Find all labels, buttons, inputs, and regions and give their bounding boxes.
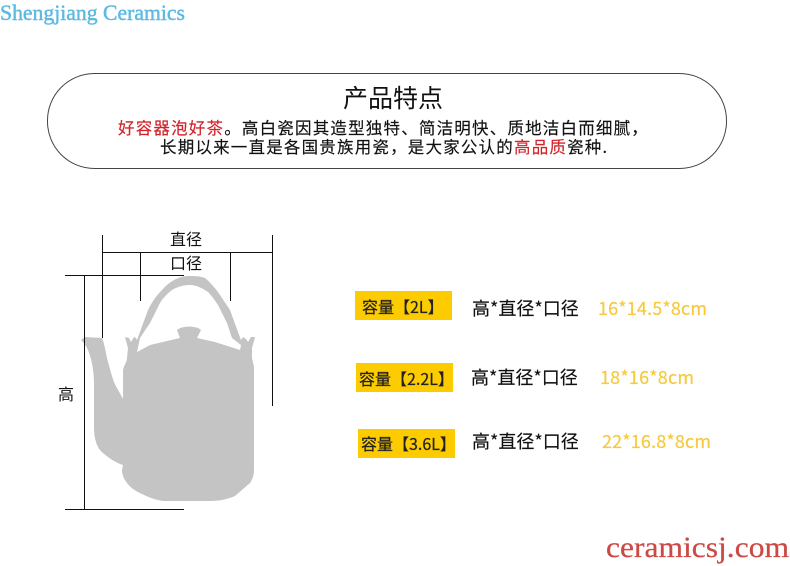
- label: diameter: 直径: [170, 226, 202, 250]
- dimension label: 高*直径*口径: [472, 295, 579, 321]
- dimension label: 高*直径*口径: [471, 364, 578, 390]
- watermark: ceramicsj.com: ceramicsj.com: [606, 531, 789, 564]
- capacity badge: 2.2L: 容量【2.2L】: [359, 366, 454, 390]
- text block: line two: 长期以来一直是各国贵族用瓷，是大家公认的高品质瓷种.: [160, 134, 608, 158]
- icon: teapot silhouette: [81, 276, 255, 501]
- text block: line one: 好容器泡好茶。高白瓷因其造型独特、简洁明快、质地洁白而细腻，: [118, 115, 649, 139]
- capacity badge: 2L: 容量【2L】: [362, 294, 444, 318]
- spec row: 2L: [355, 291, 707, 321]
- mouth diameter line: [140, 252, 230, 301]
- dimension value: 16*14.5*8cm: [598, 295, 707, 321]
- heading: product features: 产品特点: [343, 79, 443, 115]
- diameter line: [102, 235, 272, 406]
- dimension diagram: teapot: [58, 226, 272, 510]
- capacity badge: 3.6L: 容量【3.6L】: [361, 431, 456, 455]
- spec row: 3.6L: [358, 428, 711, 458]
- spec row: 2.2L: [356, 363, 694, 392]
- capacity badge: 2L: [355, 291, 452, 320]
- dimension value: 18*16*8cm: [600, 364, 694, 390]
- dimension label: 高*直径*口径: [472, 428, 579, 454]
- label: mouth diameter: 口径: [170, 250, 202, 274]
- label: height: 高: [58, 381, 74, 405]
- panel: product features: [48, 74, 726, 168]
- brand title: Shengjiang Ceramics: Shengjiang Ceramics: [0, 0, 185, 25]
- height line: [65, 275, 184, 510]
- dimension value: 22*16.8*8cm: [602, 428, 711, 454]
